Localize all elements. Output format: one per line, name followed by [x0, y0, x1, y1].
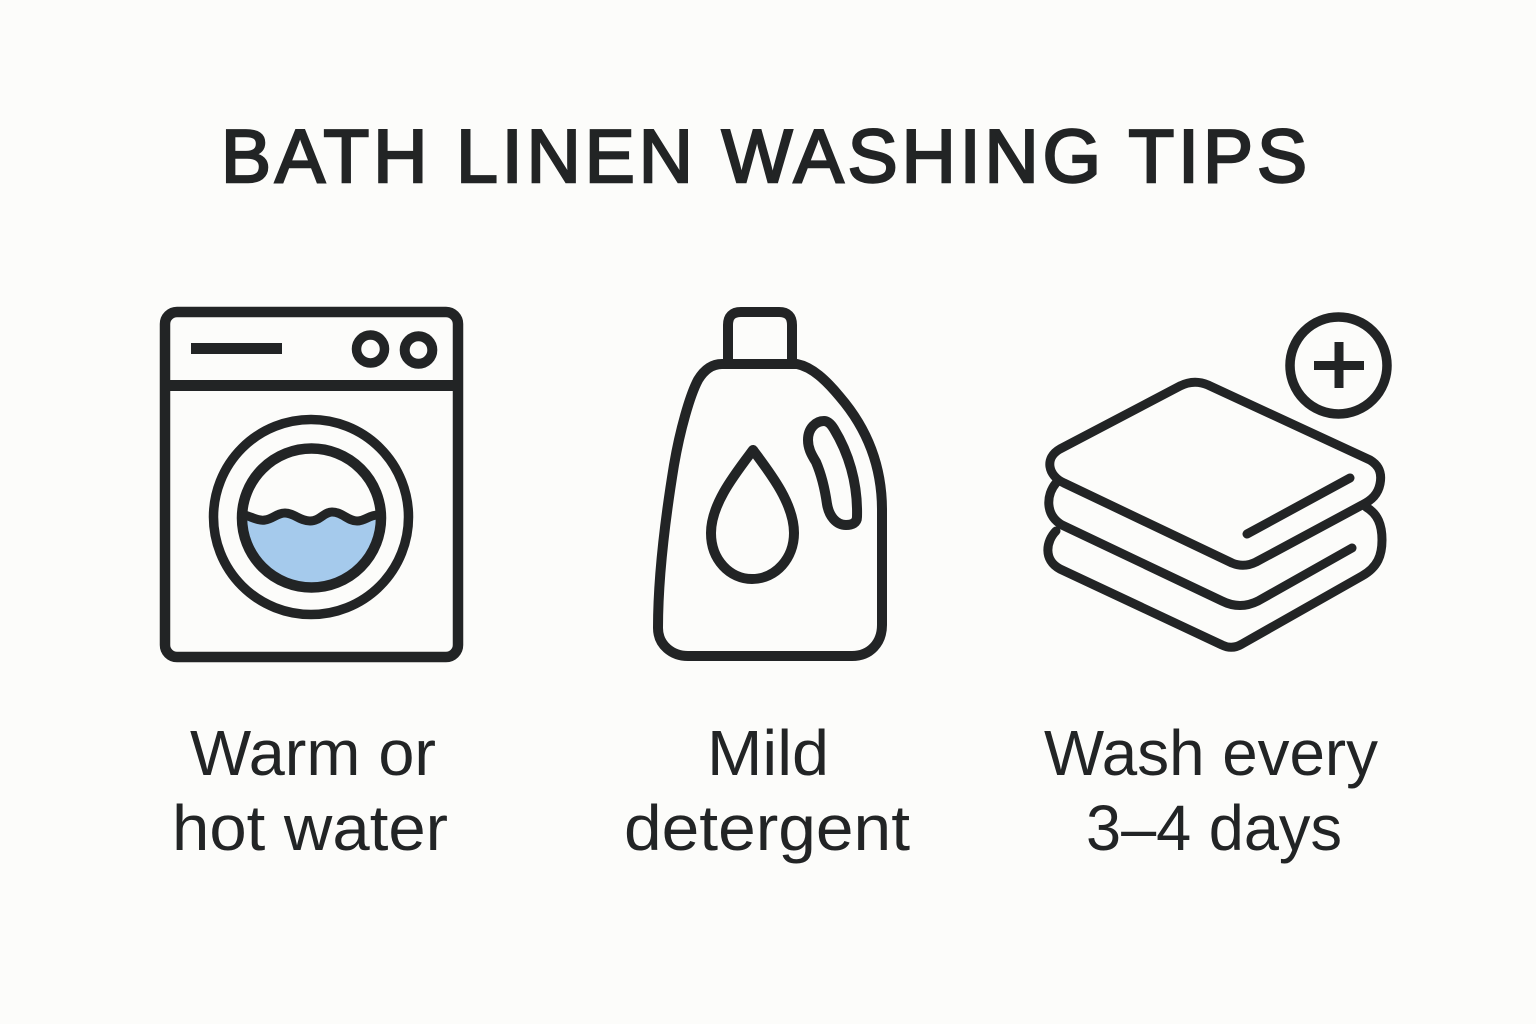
icon: detergent bottle [658, 312, 882, 656]
label: wash every 3-4 days: 3–4 days [1086, 792, 1342, 864]
label: warm or hot water: Warm or [190, 717, 436, 789]
label: mild detergent: detergent [624, 792, 910, 864]
icon: washing machine [165, 312, 458, 657]
icon: folded towels with plus [1048, 317, 1387, 647]
label: warm or hot water: hot water [172, 792, 448, 864]
label: mild detergent: Mild [707, 717, 829, 789]
label: wash every 3-4 days: Wash every [1044, 717, 1378, 789]
title: BATH LINEN WASHING TIPS [221, 114, 1307, 198]
